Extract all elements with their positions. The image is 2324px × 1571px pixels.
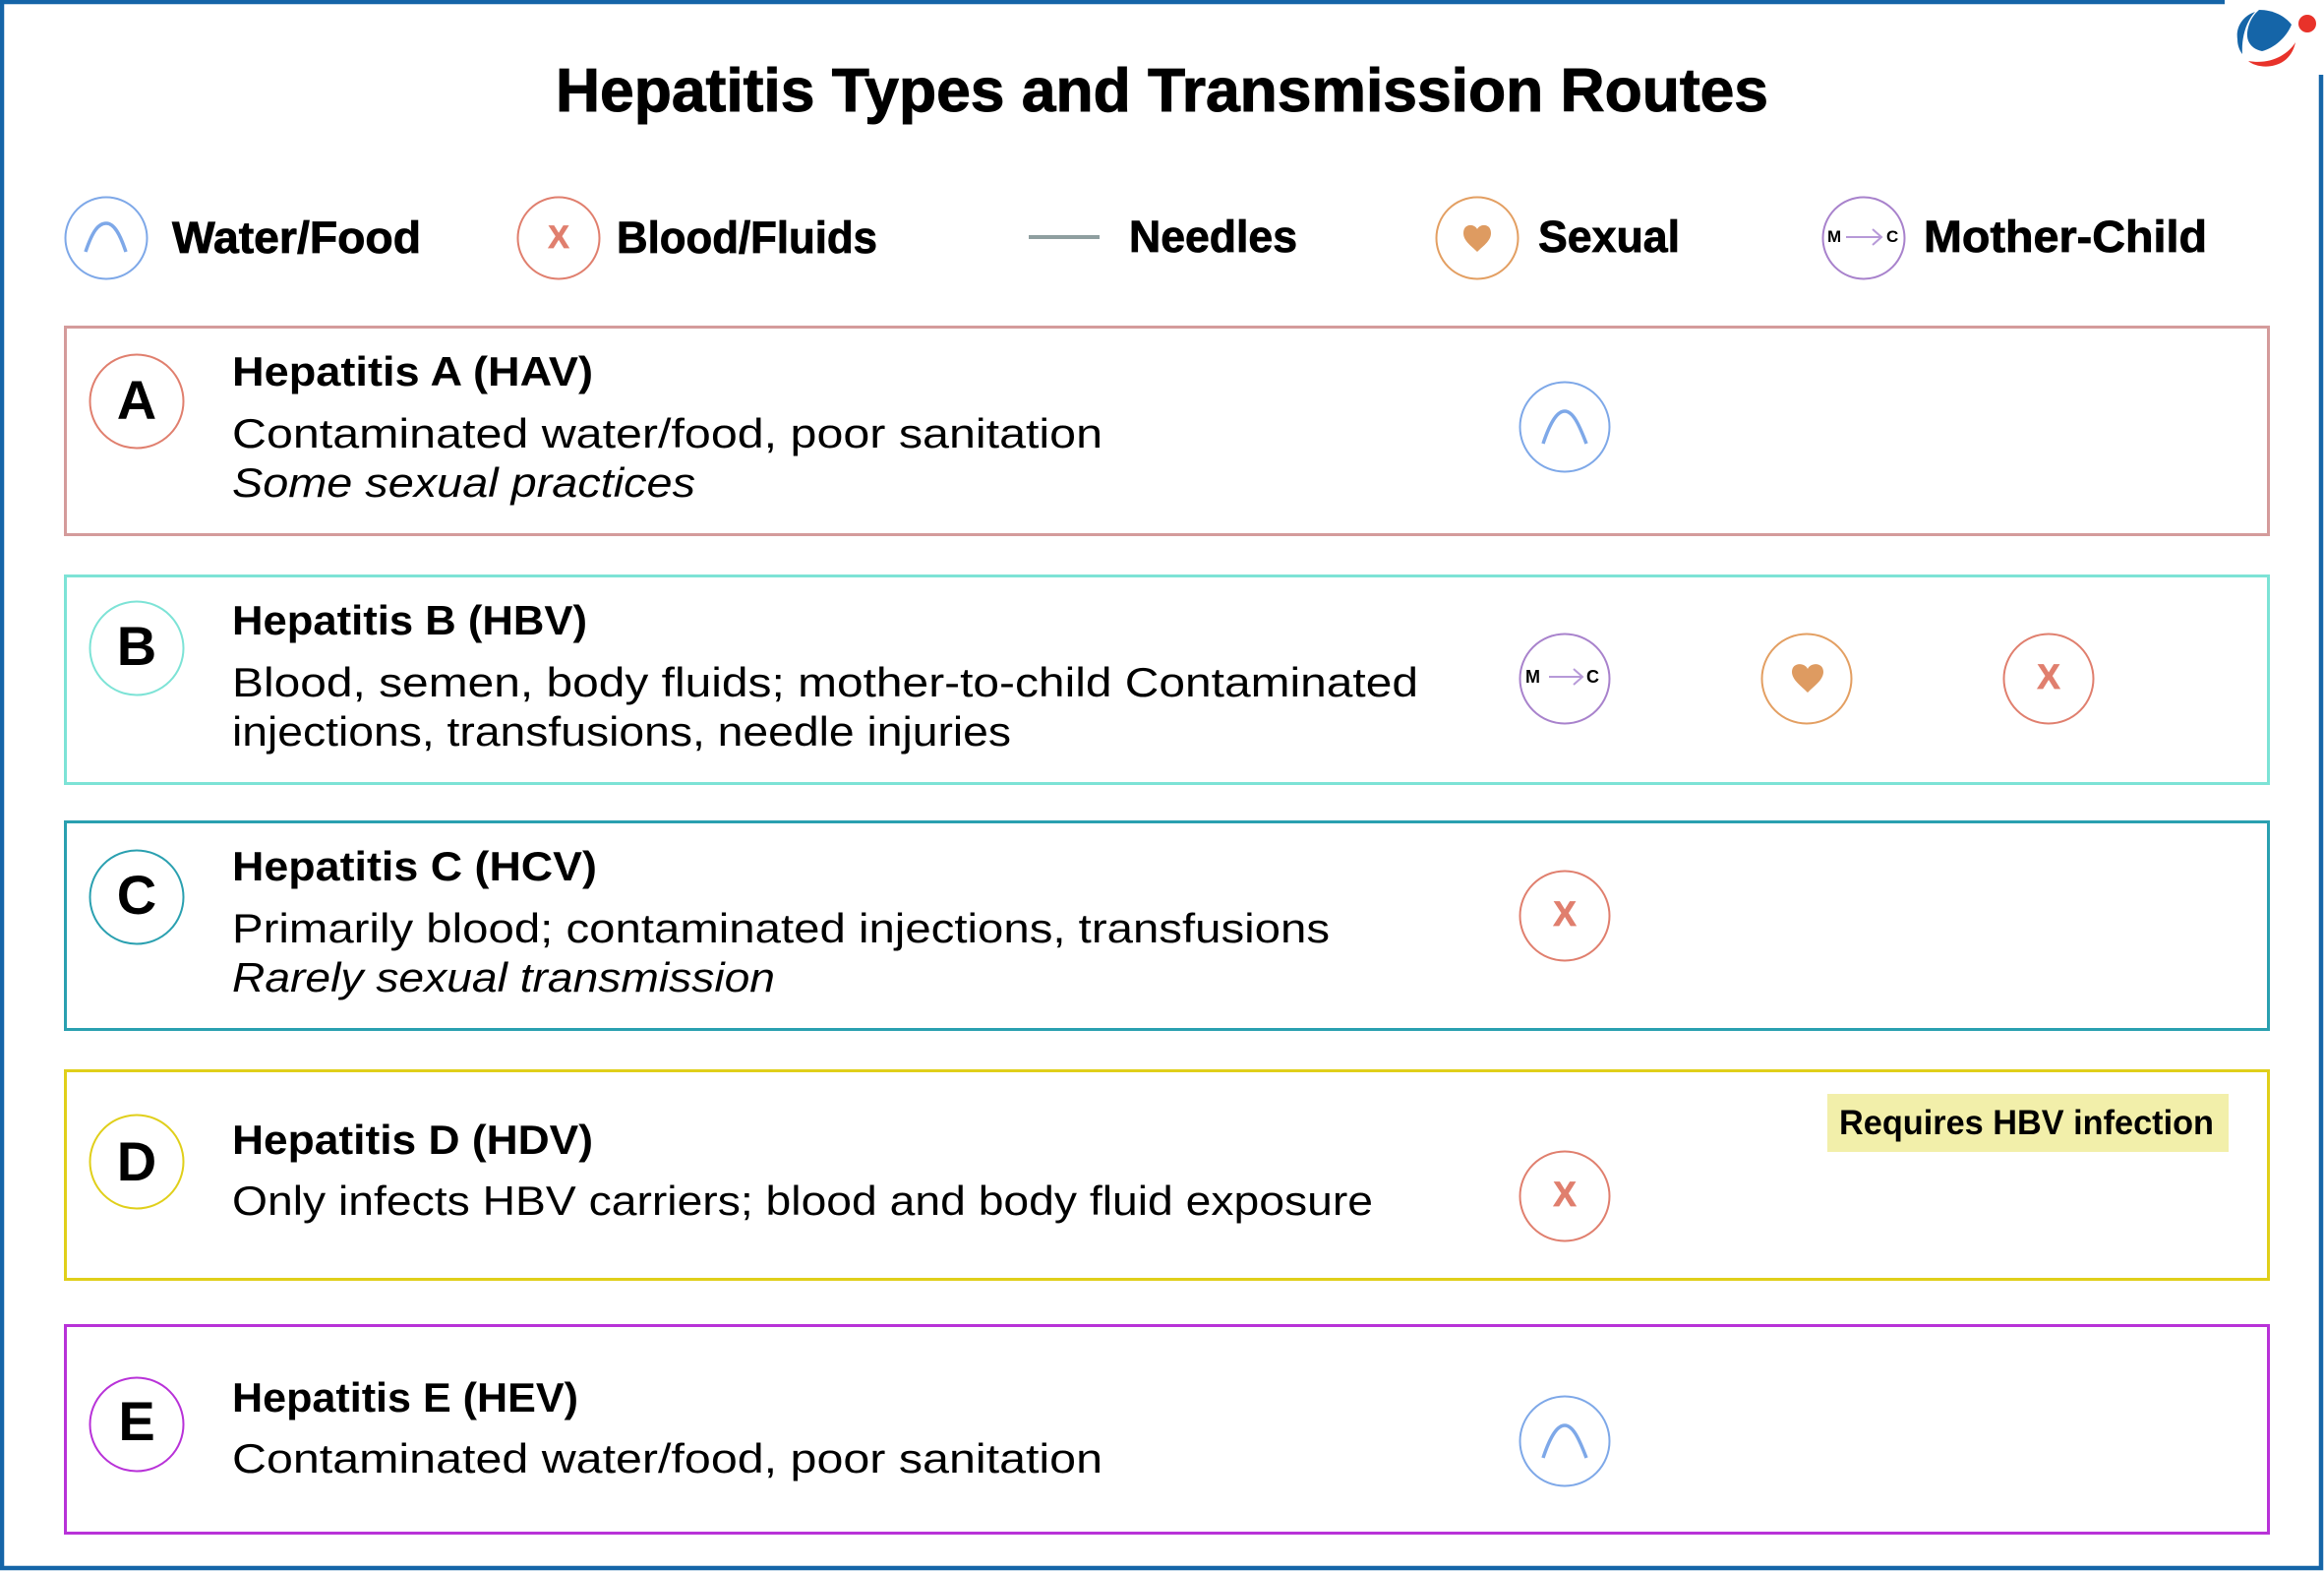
icon: blood: X [1553, 1176, 1577, 1214]
icon: water [1520, 382, 1609, 472]
description E: Contaminated water/food, poor sanitation [232, 1435, 1102, 1481]
badge C [90, 850, 183, 944]
description A: Contaminated water/food, poor sanitation [232, 410, 1102, 456]
heading E: Hepatitis E (HEV) [232, 1374, 578, 1420]
icon: blood: X [1553, 895, 1577, 934]
panel: hepatitis C [65, 822, 2268, 1029]
legend: sexual: Sexual [1538, 211, 1680, 262]
icon: mother-child [1520, 634, 1609, 724]
heading D: Hepatitis D (HDV) [232, 1117, 593, 1163]
legend: water/food: Water/Food [172, 212, 421, 263]
note C: Rarely sexual transmission [232, 954, 775, 1000]
legend: water/food [65, 197, 421, 279]
icon: mother-child: M [1525, 667, 1540, 687]
legend: mother-child: Mother-Child [1924, 211, 2207, 262]
description B: injections, transfusions, needle injuries [232, 708, 1011, 755]
heading B: Hepatitis B (HBV) [232, 597, 587, 643]
icon: blood [2004, 634, 2093, 724]
badge B [90, 602, 183, 695]
callout: requires HBV infection: Requires HBV infection [1839, 1104, 2214, 1142]
legend [65, 197, 2207, 279]
legend: mother-child: C [1886, 227, 1898, 246]
badge D [90, 1116, 183, 1208]
legend: mother-child [1823, 197, 2207, 279]
badge A [90, 354, 183, 449]
description C: Primarily blood; contaminated injections, transfusions [232, 905, 1330, 951]
description D: Only infects HBV carriers; blood and body fluid exposure [232, 1178, 1373, 1224]
badge A: A [117, 369, 156, 431]
icon: blood [1520, 872, 1609, 960]
heading A: Hepatitis A (HAV) [232, 348, 593, 394]
icon: blood: X [2037, 658, 2060, 696]
description B [232, 659, 1418, 755]
icon: heart [1762, 634, 1851, 724]
badge E [90, 1377, 183, 1472]
heading C: Hepatitis C (HCV) [232, 843, 597, 889]
badge C: C [117, 864, 156, 926]
panel: hepatitis E [65, 1326, 2268, 1533]
panel: hepatitis B [65, 576, 2268, 783]
icon: mother-child: C [1586, 667, 1599, 687]
panel: hepatitis A [65, 327, 2268, 535]
panel: hepatitis D [65, 1070, 2268, 1279]
legend: mother-child: M [1827, 227, 1841, 246]
legend: blood/fluids: X [548, 219, 569, 255]
icon: blood [1520, 1151, 1609, 1241]
legend: blood/fluids [517, 197, 877, 279]
icon: water [1520, 1397, 1609, 1485]
note A: Some sexual practices [232, 459, 695, 506]
legend: needles: Needles [1129, 211, 1297, 262]
badge E: E [118, 1390, 155, 1452]
legend: blood/fluids: Blood/Fluids [617, 212, 877, 263]
badge B: B [117, 615, 156, 677]
legend: sexual [1436, 197, 1680, 279]
badge D: D [117, 1130, 156, 1192]
callout: requires HBV infection [1827, 1094, 2229, 1152]
description B: Blood, semen, body fluids; mother-to-child Contaminated [232, 659, 1418, 705]
title: Hepatitis Types and Transmission Routes [556, 57, 1768, 125]
logo [2237, 10, 2316, 67]
